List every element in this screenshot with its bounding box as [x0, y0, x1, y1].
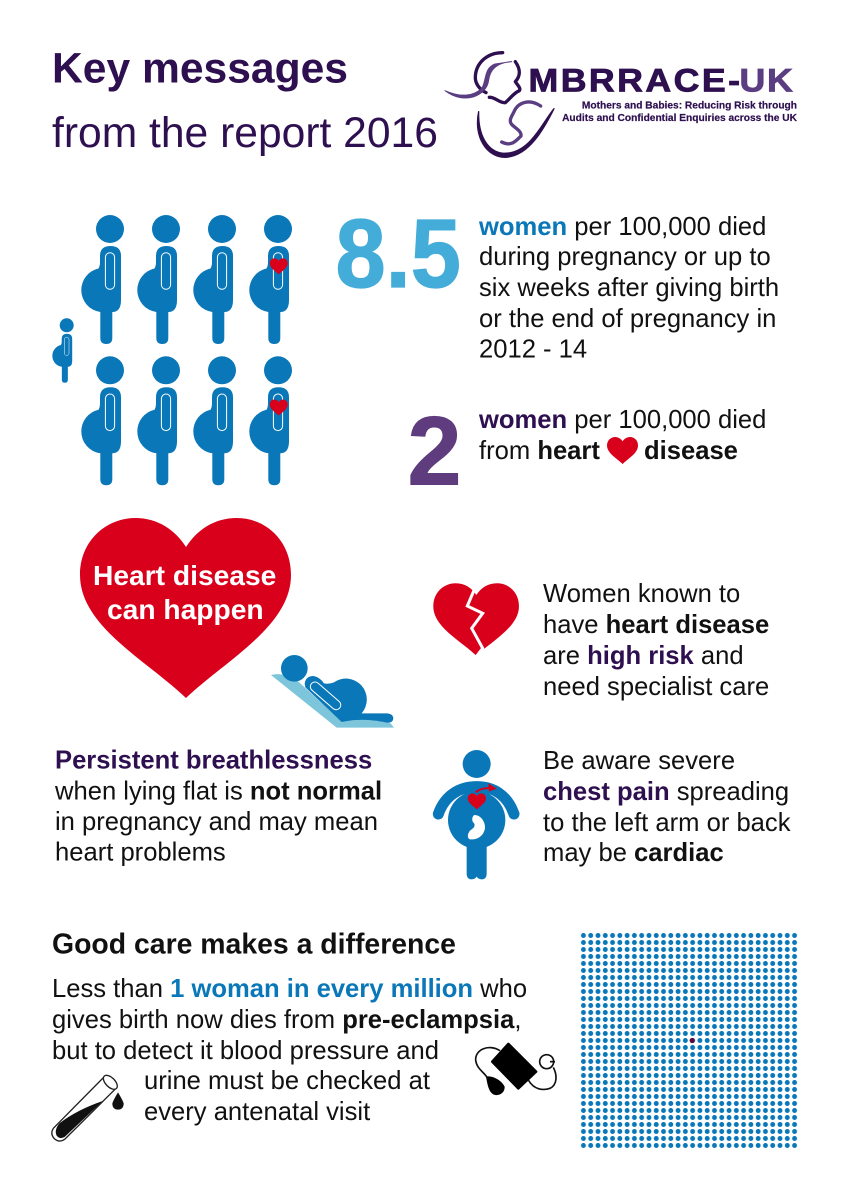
- title line 1: Key messages: [52, 45, 348, 93]
- stat: 2: 2: [408, 396, 461, 505]
- icon: test tube: [52, 1073, 124, 1141]
- text: pre-eclampsia: urine must be checked at: [144, 1067, 430, 1095]
- text: 8.5 women died: women per 100,000 died: [479, 213, 766, 241]
- text: chest pain: to the left arm or back: [543, 809, 791, 837]
- text: 8.5 women died: 2012 - 14: [479, 336, 587, 364]
- text: persistent breathlessness: when lying flat is not normal: [55, 777, 382, 805]
- big heart: heart disease can happen: [80, 518, 291, 698]
- icon: broken heart: [433, 583, 519, 657]
- icon: reclining pregnant woman: [271, 655, 394, 728]
- heading: good care: Good care makes a difference: [52, 928, 456, 960]
- dot grid: one in a million: [580, 932, 798, 1149]
- stat: 8.5: 8.5: [336, 199, 461, 308]
- person row 1: [81, 215, 292, 344]
- person row 2: [81, 356, 292, 485]
- text: known heart disease: are high risk and: [543, 642, 744, 670]
- pictogram: 8.5 pregnant women with 2 hearts: [52, 215, 292, 485]
- text: known heart disease: have heart disease: [543, 611, 769, 639]
- logo tagline second line: Audits and Confidential Enquiries across the UK: [562, 113, 798, 124]
- fetus: [468, 815, 485, 839]
- text: persistent breathlessness: heart problems: [55, 838, 226, 866]
- heart text: can happen: [107, 593, 264, 625]
- red dot: [690, 1038, 695, 1043]
- text: known heart disease: Women known to: [543, 580, 740, 608]
- text: persistent breathlessness: Persistent breathlessness: [55, 747, 372, 775]
- title: [52, 45, 438, 157]
- text: 2 women heart disease: [478, 406, 774, 465]
- text: pre-eclampsia: Less than 1 woman in every million who: [52, 975, 527, 1003]
- text: pre-eclampsia: every antenatal visit: [144, 1098, 370, 1126]
- text: 2 women heart disease: women per 100,000 died: [479, 406, 766, 434]
- icon: pregnant woman with chest pain: [438, 750, 514, 879]
- text: 8.5 women died: or the end of pregnancy in: [479, 305, 776, 333]
- text: 2 women heart disease: from heart: [479, 437, 600, 465]
- logo wordmark UK: UK: [740, 63, 794, 99]
- text: known heart disease: need specialist care: [543, 673, 769, 701]
- logo mark: mother and baby profiles: [445, 53, 554, 157]
- logo tagline: Mothers and Babies: Reducing Risk through: [582, 100, 797, 112]
- logo: MBRRACE-UK: [445, 53, 798, 157]
- text: pre-eclampsia: but to detect it blood pressure and: [52, 1037, 439, 1065]
- heart: [468, 793, 486, 809]
- text: chest pain: chest pain spreading: [543, 778, 789, 806]
- heart text: Heart disease: [93, 559, 276, 591]
- half person: [52, 318, 74, 383]
- text: 8.5 women died: during pregnancy or up to: [479, 243, 771, 271]
- text: chest pain: Be aware severe: [543, 747, 735, 775]
- icon: blood pressure cuff: [476, 1044, 556, 1095]
- text: persistent breathlessness: in pregnancy and may mean: [55, 808, 378, 836]
- text: 2 women heart disease: disease: [644, 437, 738, 465]
- icon: inline heart: [607, 437, 638, 464]
- title line 2: from the report 2016: [52, 109, 438, 157]
- text: pre-eclampsia: gives birth now dies from pre-eclampsia,: [52, 1006, 521, 1034]
- text: 8.5 women died: six weeks after giving birth: [479, 274, 779, 302]
- text: chest pain: may be cardiac: [543, 839, 724, 867]
- pain arrow: [476, 783, 497, 792]
- logo wordmark: MBRRACE-: [528, 63, 742, 99]
